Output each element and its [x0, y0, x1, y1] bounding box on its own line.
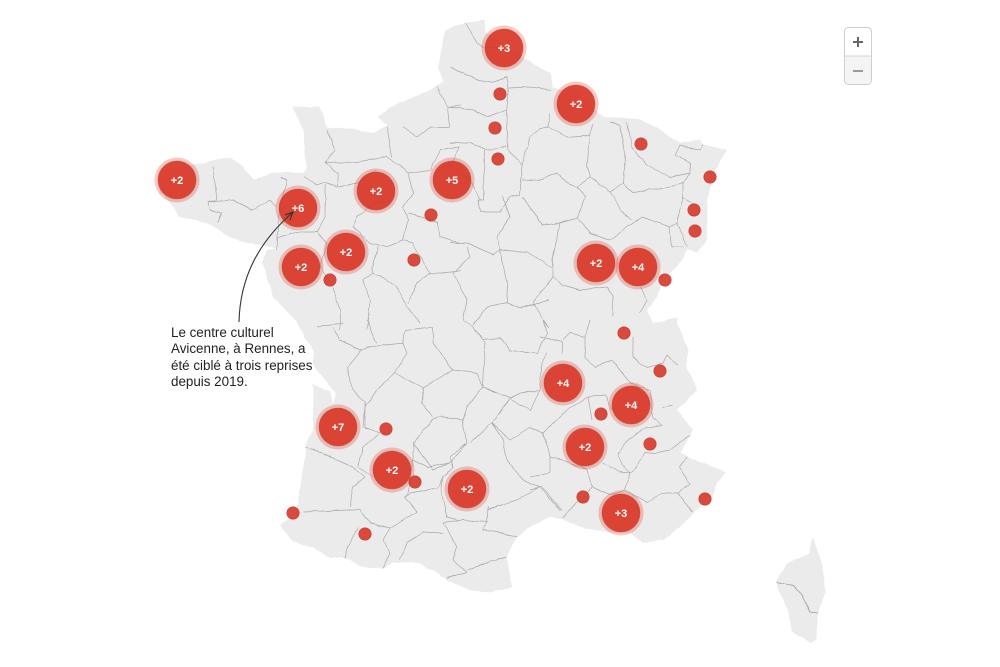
- minus button: [853, 70, 863, 72]
- cluster +2 Dijon: [574, 240, 618, 286]
- plus button: [853, 37, 863, 47]
- cluster +2 Ardennes: +2: [570, 99, 582, 111]
- cluster +2 Brest: [154, 158, 200, 202]
- cluster +2 Toulouse: +2: [461, 484, 473, 496]
- cluster +2 Agen: [370, 448, 414, 492]
- cluster +7 Bordeaux: +7: [332, 422, 344, 434]
- cluster +2 Le Mans: +2: [370, 186, 382, 198]
- cluster +2 Angers: [324, 230, 368, 274]
- cluster +4 Besançon: +4: [632, 262, 645, 274]
- cluster +2 Ardèche: [562, 424, 608, 470]
- cluster +2 Nantes: [278, 244, 324, 290]
- Corsica border: [777, 582, 818, 613]
- cluster +4 Grenoble: +4: [625, 400, 638, 412]
- cluster +4 Lyon: +4: [557, 378, 570, 390]
- cluster +3 Marseille: +3: [615, 508, 627, 520]
- cluster +2 Le Mans: [354, 168, 398, 214]
- base map: departments: [160, 20, 825, 643]
- cluster +2 Dijon: +2: [590, 258, 602, 270]
- cluster +2 Nantes: +2: [295, 262, 307, 274]
- cluster +3 Lille: [482, 26, 526, 70]
- annotation text: été ciblé à trois reprises: [171, 358, 313, 373]
- Corsica outline: [777, 537, 825, 643]
- cluster +4 Besançon: [616, 244, 660, 290]
- arrow: annotation to Rennes: [239, 212, 293, 322]
- cluster +5 Paris: +5: [446, 175, 458, 187]
- cluster +6 Rennes: +6: [292, 203, 304, 215]
- cluster +7 Bordeaux: [316, 404, 360, 450]
- annotation text: Avicenne, à Rennes, a: [171, 341, 306, 356]
- cluster +2 Agen: +2: [386, 465, 398, 477]
- mainland outline: [160, 20, 727, 593]
- cluster +5 Paris: [430, 158, 474, 202]
- cluster +2 Toulouse: [444, 466, 490, 512]
- single incident dots: [287, 88, 716, 540]
- cluster +6 Rennes: [276, 186, 320, 230]
- clusters: [154, 26, 660, 536]
- zoom controls: [844, 28, 872, 84]
- annotation text: depuis 2019.: [171, 374, 248, 389]
- cluster +4 Lyon: [540, 360, 586, 406]
- cluster +3 Lille: +3: [498, 43, 510, 55]
- cluster +2 Angers: +2: [340, 247, 352, 259]
- department borders: [208, 23, 703, 578]
- cluster +2 Brest: +2: [171, 175, 183, 187]
- cluster +4 Grenoble: [608, 382, 654, 428]
- cluster +3 Marseille: [598, 490, 644, 536]
- annotation text: Le centre culturel: [171, 325, 274, 340]
- cluster +2 Ardennes: [554, 82, 598, 126]
- cluster +2 Ardèche: +2: [579, 442, 591, 454]
